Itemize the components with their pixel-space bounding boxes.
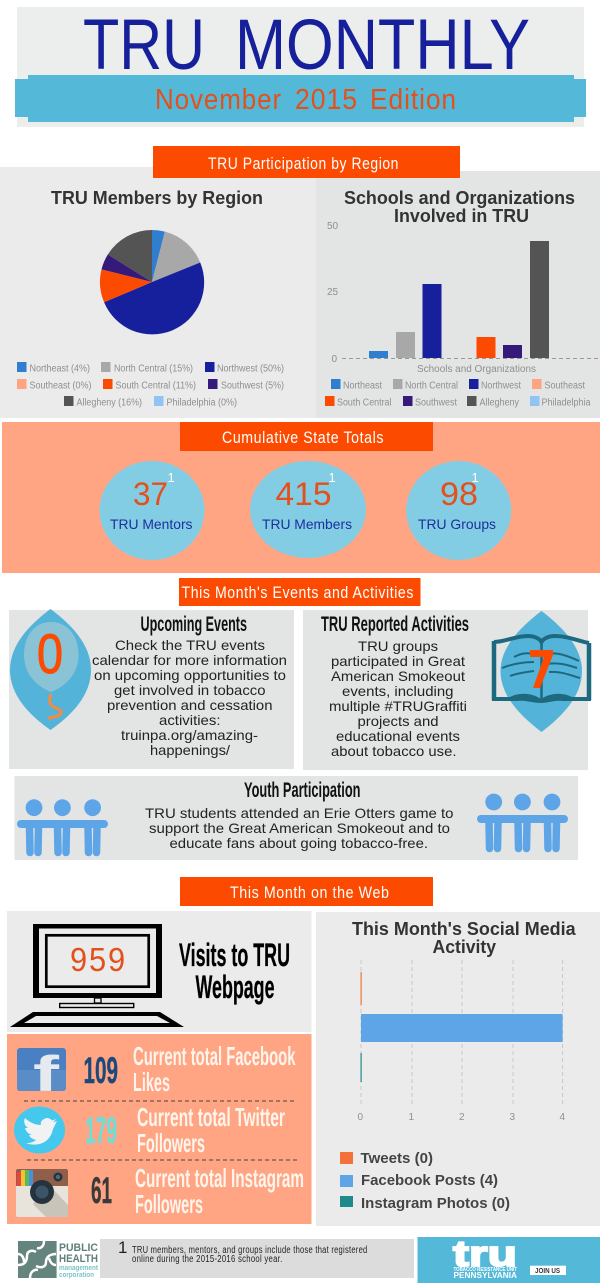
chart title [344, 188, 575, 226]
bar legend: North Central [405, 380, 458, 392]
facebook label: Likes [133, 1067, 170, 1097]
label: Visits to TRU [179, 937, 290, 973]
panel: TRU members by region [0, 167, 316, 418]
heading: TRU Reported Activities [321, 613, 469, 636]
section heading: web: This Month on the Web [230, 883, 390, 902]
chart title: TRU Members by Region [51, 188, 263, 208]
body text: TRU groups [358, 638, 438, 654]
stat: groups [406, 461, 511, 560]
footnote panel: TRU members, mentors, and groups include those that registered [132, 1245, 368, 1256]
logo: public health management corporation: HEALTH [59, 1253, 98, 1265]
legend: Tweets (0) [360, 1150, 433, 1167]
section heading: participation [153, 146, 460, 178]
body text: prevention and cessation [107, 697, 272, 713]
stat: mentors: 1 [168, 470, 175, 485]
bar legend: Southwest [415, 398, 457, 408]
chart title: This Month's Social Media [352, 919, 577, 939]
chart title: Schools and Organizations [344, 188, 575, 208]
legend [340, 1150, 510, 1212]
twitter label: Followers [137, 1128, 205, 1158]
panel: social totals [7, 1034, 312, 1224]
footnote panel: 1 [118, 1238, 127, 1257]
section heading: web [180, 877, 433, 906]
bar legend: Allegheny [480, 398, 519, 408]
bar chart [327, 221, 600, 375]
edition: November [155, 84, 282, 116]
edition: Edition [370, 84, 457, 116]
logo: tru pennsylvania: PENNSYLVANIA [454, 1271, 517, 1280]
body text: happenings/ [150, 742, 230, 758]
body text: on upcoming opportunities to [94, 667, 286, 683]
body text: truinpa.org/amazing- [121, 727, 258, 743]
body text: events, including [342, 683, 454, 699]
instagram label [135, 1163, 304, 1219]
body text: activities: [159, 712, 220, 728]
stat: groups: TRU Groups [418, 516, 496, 532]
bar legend: Northeast [343, 380, 382, 392]
stat: members [250, 461, 366, 558]
body text: participated in Great [331, 653, 465, 669]
icon: open book [492, 611, 591, 732]
label [179, 937, 290, 1005]
pie legend: Northeast (4%) [30, 364, 90, 374]
icon: instagram [16, 1169, 68, 1217]
icon: balloon: 0 [37, 622, 63, 685]
stat: groups: 1 [472, 470, 479, 485]
pie legend: North Central (15%) [114, 364, 193, 374]
body text: educational events [336, 728, 460, 744]
pie legend [17, 362, 284, 408]
bar chart: Schools and Organizations [417, 364, 536, 375]
instagram label: Current total Instagram [135, 1163, 304, 1193]
bar legend: Philadelphia [542, 398, 591, 408]
title: TRU [83, 6, 205, 85]
facebook label: Current total Facebook [133, 1041, 296, 1071]
chart title: Activity [432, 937, 496, 957]
twitter label [137, 1102, 285, 1158]
chart title [352, 919, 577, 957]
body text: support the Great American Smokeout and to [149, 820, 450, 836]
logo: public health management corporation: corporation [59, 1272, 94, 1279]
stat: members: 415 [276, 476, 332, 512]
facebook label [133, 1041, 296, 1097]
horizontal bar chart: 4 [560, 1112, 566, 1123]
stat: mentors [100, 461, 204, 560]
legend: Instagram Photos (0) [361, 1195, 510, 1212]
section heading: events [179, 578, 420, 606]
panel: reported activities [303, 610, 591, 770]
bar chart: 25 [327, 287, 338, 298]
body text [145, 805, 454, 851]
logo: tru pennsylvania [418, 1233, 600, 1283]
horizontal bar chart: 3 [510, 1112, 516, 1123]
horizontal bar chart [358, 960, 566, 1123]
logo: public health management corporation: management [59, 1265, 99, 1272]
panel: youth participation [14, 776, 578, 860]
body text: American Smokeout [331, 668, 465, 684]
pie legend: South Central (11%) [116, 380, 196, 392]
bar legend [325, 379, 591, 408]
edition: 2015 [295, 84, 358, 116]
body text: TRU students attended an Erie Otters game to [145, 805, 454, 821]
instagram count: 61 [91, 1170, 112, 1211]
body text: educate fans about going tobacco-free. [170, 835, 428, 851]
stat: members: 1 [328, 470, 336, 485]
logo: tru pennsylvania: JOIN US [535, 1268, 560, 1275]
horizontal bar chart: 0 [358, 1112, 364, 1123]
horizontal bar chart: 2 [459, 1112, 465, 1123]
body text: calendar for more information [92, 652, 287, 668]
facebook count: 109 [84, 1050, 118, 1091]
pie legend: Allegheny (16%) [76, 398, 142, 408]
pie legend: Northwest (50%) [217, 364, 284, 374]
bar legend: Northwest [481, 380, 521, 392]
pie chart [100, 230, 204, 334]
icon: balloon [10, 609, 91, 730]
body text: about tobacco use. [331, 743, 456, 759]
stat: groups: 98 [440, 476, 478, 512]
panel: webpage visits [7, 911, 312, 1032]
icon: computer [10, 924, 184, 1027]
stat: mentors: TRU Mentors [110, 516, 192, 532]
title [83, 6, 530, 85]
body text: get involved in tobacco [114, 682, 266, 698]
instagram label: Followers [135, 1189, 203, 1219]
banner [15, 75, 586, 122]
title: MONTHLY [235, 6, 530, 85]
icon: facebook: f [33, 1046, 60, 1102]
bar chart: 0 [332, 354, 338, 365]
edition [155, 84, 457, 116]
stat: mentors: 37 [133, 476, 168, 512]
section heading: participation: TRU Participation by Region [208, 154, 399, 173]
chart title: Involved in TRU [394, 206, 529, 226]
body text [329, 638, 467, 759]
legend: Facebook Posts (4) [361, 1172, 498, 1189]
section heading: totals: Cumulative State Totals [222, 428, 384, 447]
logo: tru pennsylvania: tru [453, 1233, 517, 1274]
pie legend: Southwest (5%) [221, 380, 284, 392]
icon: people right [477, 794, 568, 848]
icon: twitter [14, 1106, 65, 1154]
bar chart: 50 [327, 221, 338, 232]
section heading: events: This Month's Events and Activities [182, 583, 414, 602]
body text: projects and [358, 713, 438, 729]
footnote panel: online during the 2015-2016 school year. [132, 1254, 282, 1265]
bar legend: South Central [337, 398, 392, 408]
body text: Check the TRU events [115, 637, 265, 653]
pie legend: Philadelphia (0%) [166, 398, 237, 408]
twitter label: Current total Twitter [137, 1102, 285, 1132]
panel: upcoming events [9, 609, 294, 769]
heading: Youth Participation [244, 779, 360, 802]
panel: social media activity [316, 912, 600, 1226]
body text: multiple #TRUGraffiti [329, 698, 467, 714]
twitter count: 179 [85, 1110, 117, 1151]
section heading: totals [180, 422, 433, 451]
logo: public health management corporation: PUBLIC [59, 1242, 98, 1254]
icon: people left [17, 799, 108, 852]
logo: public health management corporation [18, 1241, 99, 1279]
heading: Upcoming Events [140, 613, 247, 636]
header [15, 6, 586, 127]
visit count: 959 [70, 941, 127, 978]
panel: cumulative state totals [2, 422, 600, 573]
logo: tru pennsylvania: TOBACCO RESISTANCE UNIT [454, 1267, 517, 1273]
pie legend: Southeast (0%) [30, 380, 92, 392]
panel: schools and organizations [316, 171, 600, 418]
horizontal bar chart: 1 [408, 1112, 414, 1123]
footnote panel [100, 1238, 414, 1278]
stat: members: TRU Members [262, 516, 352, 532]
body text [92, 637, 287, 758]
bar legend: Southeast [544, 380, 585, 392]
label: Webpage [196, 969, 274, 1005]
icon: facebook [17, 1046, 66, 1102]
